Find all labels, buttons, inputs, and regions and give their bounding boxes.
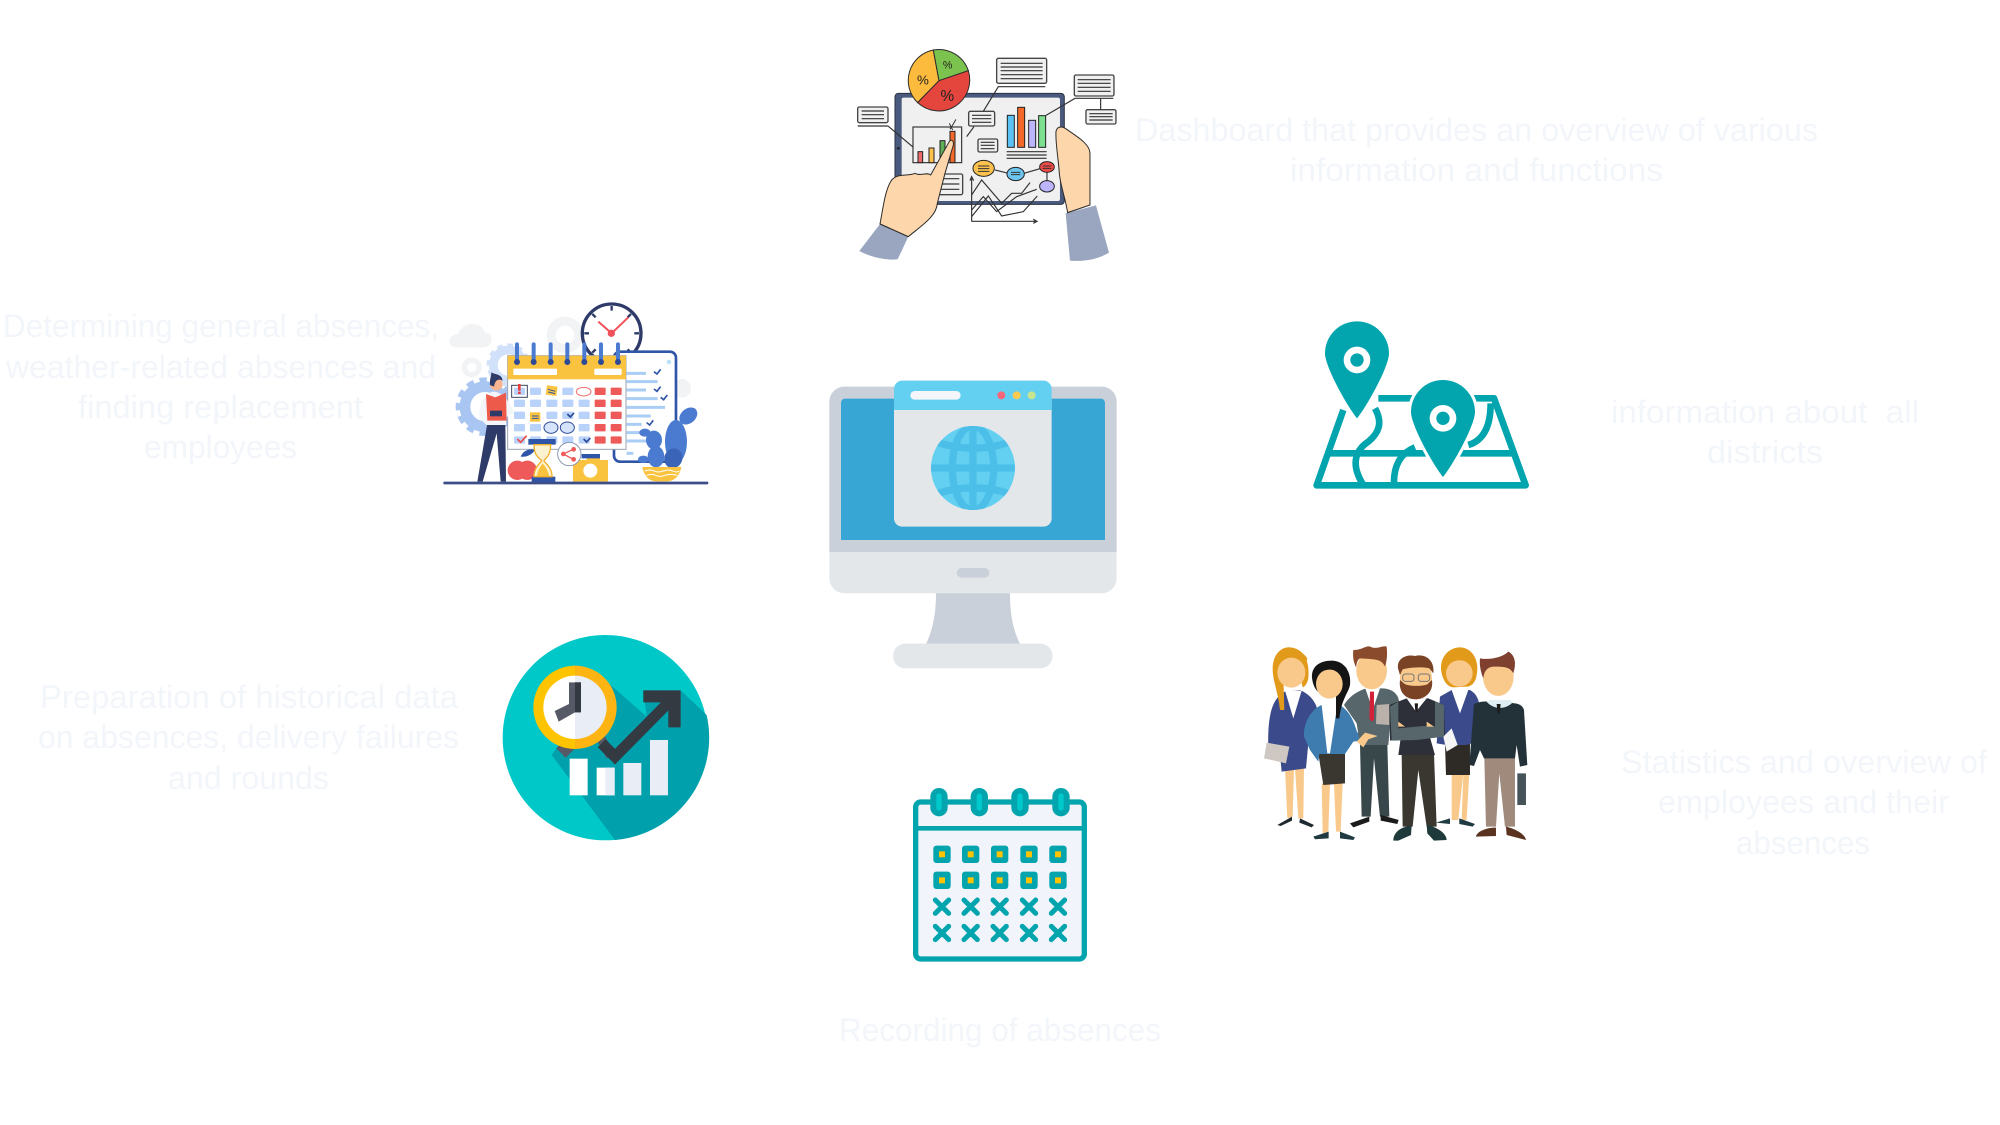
text: general absences caption: finding replacement (78, 389, 363, 425)
text: employee statistics caption: absences (1736, 825, 1870, 861)
text: districts caption: districts (1707, 434, 1823, 470)
icon: background gears (458, 346, 528, 433)
icon: cactus in pot (638, 404, 701, 481)
icon: scheduling calendar scene with person, clock and plant (443, 304, 708, 484)
text: employee statistics caption: employees and their (1658, 784, 1949, 820)
figure: woman with folder (1264, 647, 1318, 827)
text: recording caption: Recording of absences (839, 1012, 1161, 1048)
icon: dashboard tablet with charts held in hands: % (917, 72, 929, 87)
icon: standing person (477, 372, 514, 482)
text: historical data caption: on absences, delivery failures (38, 719, 459, 755)
figure: woman behind bearded man (1436, 647, 1482, 827)
text: historical data caption (38, 679, 459, 796)
icon: dashboard tablet with charts held in hands: % (943, 59, 953, 71)
figure: bearded man with crossed arms (1389, 655, 1447, 841)
icon: clock and growth chart badge (503, 635, 709, 840)
text: general absences caption (3, 308, 439, 465)
icon: phone with checklist (614, 352, 676, 462)
text: employee statistics caption: Statistics and overview of (1621, 744, 1987, 780)
figure: woman in blue jacket (1304, 661, 1375, 840)
icon: folder with share badge (558, 442, 608, 482)
figure: man in dark sweater with briefcase (1469, 652, 1527, 840)
icon: dashboard tablet with charts held in hands: % (941, 88, 955, 105)
icon: dashboard tablet with charts held in hands (858, 49, 1116, 261)
text: districts caption: information about all (1611, 394, 1919, 430)
text: dashboard caption: information and functions (1290, 152, 1663, 188)
icon: absence calendar with crosses (916, 788, 1084, 959)
text: employee statistics caption (1621, 744, 1987, 861)
icon: map with two location pins (1317, 321, 1526, 485)
text: districts caption (1611, 394, 1919, 470)
text: general absences caption: Determining general absences, (3, 308, 439, 344)
icon: group of six employees (1264, 646, 1527, 841)
text: dashboard caption: Dashboard that provides an overview of various (1135, 112, 1818, 148)
icon: central monitor with globe window (829, 381, 1117, 668)
icon: apple (508, 449, 537, 480)
figure: man in grey suit with red tie (1344, 646, 1399, 827)
icon: calendar page (508, 344, 626, 449)
text: historical data caption: and rounds (168, 760, 329, 796)
text: general absences caption: employees (144, 429, 297, 465)
icon: wall clock (582, 304, 641, 363)
text: general absences caption: weather-related absences and (5, 349, 436, 385)
text: dashboard caption (1135, 112, 1818, 188)
icon: hourglass (528, 439, 556, 482)
text: historical data caption: Preparation of historical data (40, 679, 458, 715)
